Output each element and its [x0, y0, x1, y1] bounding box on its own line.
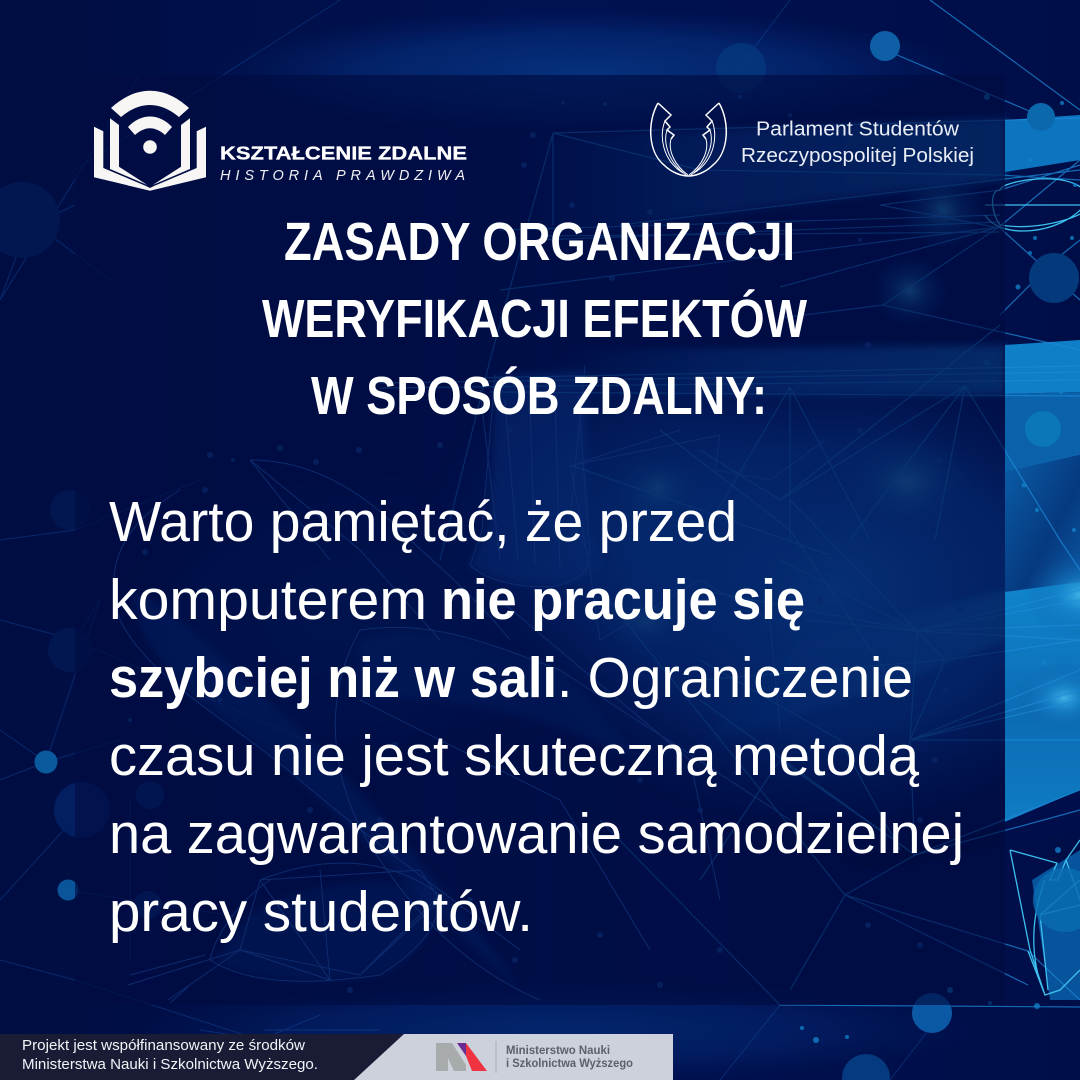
panel: dark translucent overlay	[75, 75, 1005, 1005]
body text: Warto pamiętać, że przed	[109, 490, 737, 554]
title	[262, 212, 807, 426]
title: W SPOSÓB ZDALNY:	[311, 366, 767, 426]
icon: open book with wifi	[94, 91, 206, 191]
footer: funding bar: i Szkolnictwa Wyższego	[506, 1058, 633, 1070]
logo tagline: HISTORIA PRAWDZIWA	[220, 168, 465, 184]
funding note background	[0, 1034, 404, 1080]
ministry logo	[436, 1041, 496, 1073]
logo wordmark: KSZTAŁCENIE ZDALNE	[220, 142, 467, 164]
wing lines	[114, 460, 790, 1000]
funding note text: Projekt jest współfinansowany ze środków	[22, 1038, 306, 1054]
flask lines	[470, 365, 825, 730]
body text: czasu nie jest skuteczną metodą	[109, 724, 919, 788]
book right	[985, 179, 1080, 995]
body text	[109, 490, 964, 944]
ministry panel	[354, 1034, 673, 1080]
body text: na zagwarantowanie samodzielnej	[109, 802, 964, 866]
body text: pracy studentów.	[109, 880, 533, 944]
parliament name second line: Rzeczypospolitej Polskiej	[741, 145, 974, 167]
footer: funding bar	[0, 1034, 673, 1080]
dots	[800, 94, 1077, 1043]
soft shapes: bands, wing, flask, book	[130, 118, 1005, 990]
footer: funding bar: Ministerstwa Nauki i Szkolnictwa Wyższego.	[22, 1057, 318, 1073]
icon: parliament tulip	[651, 103, 726, 176]
title: ZASADY ORGANIZACJI	[284, 212, 795, 272]
body text: szybciej niż w sali	[109, 646, 557, 710]
ministry name: Ministerstwo Nauki	[506, 1045, 610, 1057]
parliament name: Parlament Studentów	[756, 118, 960, 140]
title: WERYFIKACJI EFEKTÓW	[262, 289, 807, 349]
logo: Parlament Studentów	[651, 103, 974, 176]
body text: nie pracuje się	[441, 568, 805, 632]
body text: komputerem	[109, 568, 427, 632]
logo: Kształcenie Zdalne	[94, 91, 467, 191]
body text: . Ograniczenie	[557, 646, 913, 710]
book lines	[128, 863, 440, 1003]
right strip: blue bands	[1005, 115, 1080, 1000]
